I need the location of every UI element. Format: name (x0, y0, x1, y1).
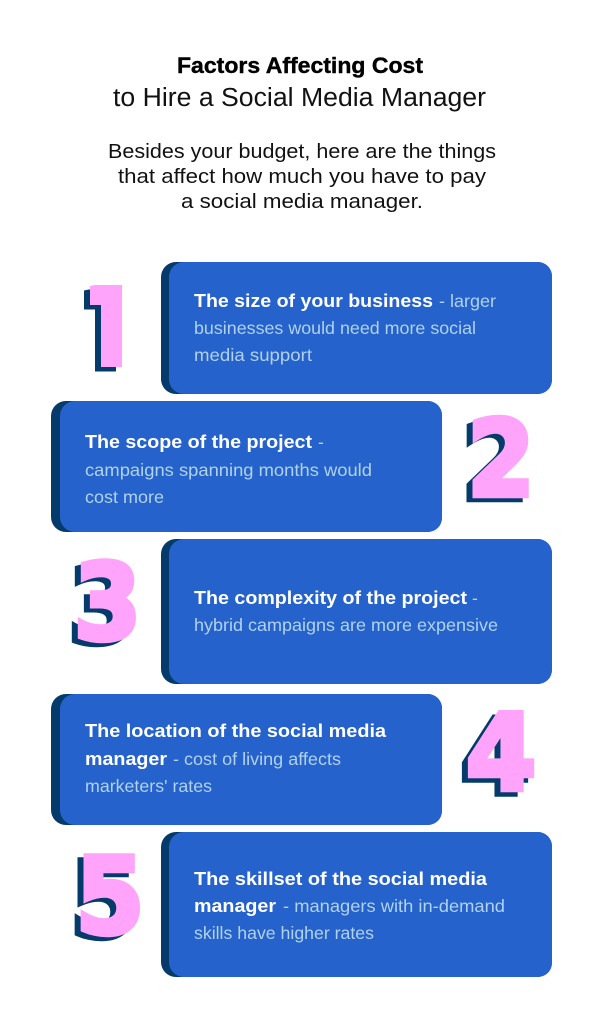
panel: size of business (161, 262, 552, 394)
panel: location of manager: The location of the social media (85, 721, 387, 741)
panel: size of business: The size of your business (194, 291, 433, 311)
panel: skillset of manager: manager (194, 896, 276, 916)
panel: complexity of project: hybrid campaigns are more expensive (194, 615, 498, 635)
panel: skillset of manager: - managers with in-demand (283, 896, 505, 916)
panel: complexity of project: - (472, 588, 478, 608)
number 4: 4 (466, 693, 536, 815)
panel: complexity of project (161, 539, 552, 684)
panel: scope of project: - (318, 432, 324, 452)
title: Factors Affecting Cost (177, 53, 424, 78)
panel: location of manager: manager (85, 749, 167, 769)
number 1 (84, 285, 122, 372)
panel: scope of project: The scope of the project (85, 432, 312, 452)
panel: skillset of manager (161, 832, 552, 977)
panel: size of business: media support (194, 345, 312, 365)
panel: size of business: - larger (439, 291, 496, 311)
title (113, 53, 487, 112)
intro text (108, 140, 496, 213)
number 1: 1 (63, 271, 139, 401)
panel: skillset of manager: The skillset of the social media (194, 869, 488, 889)
panel: size of business: businesses would need more social (194, 318, 476, 338)
panel: complexity of project: The complexity of the project (194, 588, 467, 608)
intro text: that affect how much you have to pay (118, 165, 487, 188)
intro text: a social media manager. (181, 190, 423, 213)
number 3: 3 (68, 545, 135, 668)
panel: scope of project (51, 401, 442, 532)
number 4: 4 (460, 697, 530, 820)
panel: location of manager: - cost of living affects (173, 749, 341, 769)
number 1: 1 (69, 266, 145, 396)
number 2: 2 (461, 402, 529, 524)
panel: location of manager: marketers' rates (85, 776, 212, 796)
number 2: 2 (467, 398, 535, 520)
panel: scope of project: cost more (85, 487, 164, 507)
intro text: Besides your budget, here are the things (108, 140, 496, 163)
header (108, 53, 496, 213)
number 3: 3 (74, 541, 141, 664)
panel: scope of project: campaigns spanning months would (85, 460, 372, 480)
number 5: 5 (76, 836, 144, 959)
number 5: 5 (70, 840, 138, 963)
panel: skillset of manager: skills have higher rates (194, 923, 374, 943)
panel: location of manager (51, 694, 442, 825)
title: to Hire a Social Media Manager (113, 84, 487, 112)
